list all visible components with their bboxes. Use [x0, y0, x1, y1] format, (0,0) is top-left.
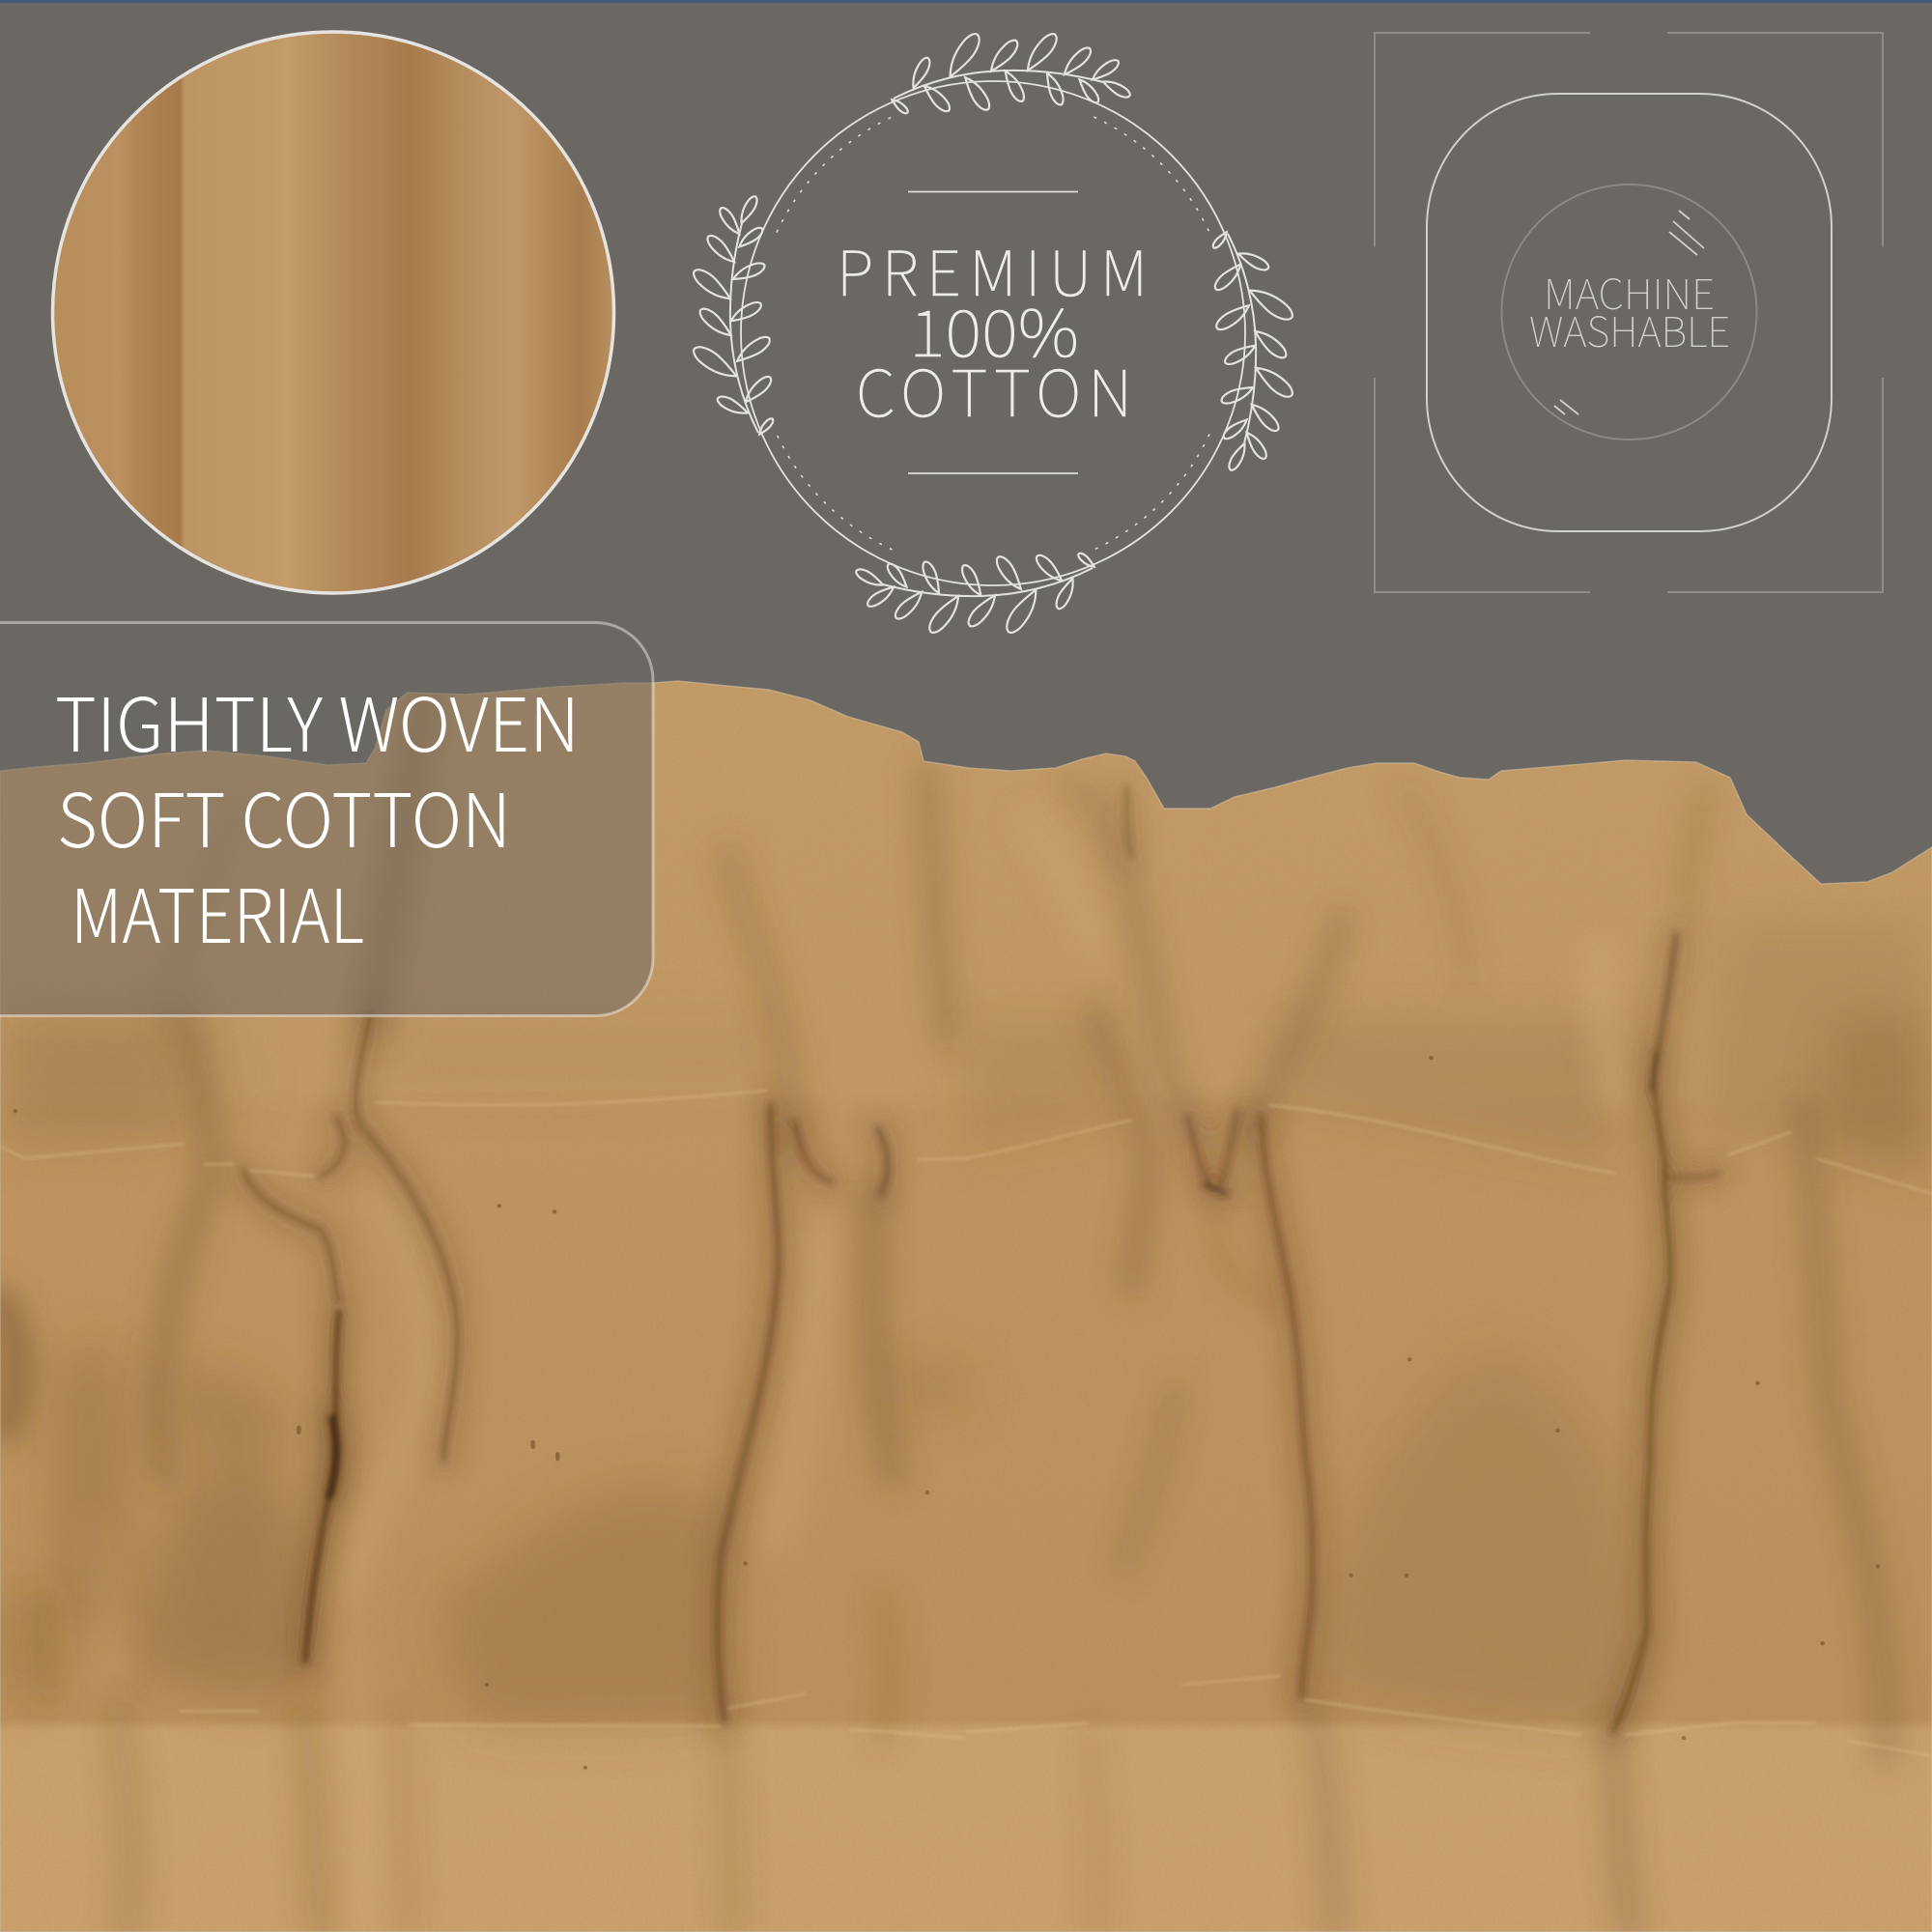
swatch: fabric close-up circle	[52, 32, 614, 593]
soft highlights	[346, 984, 1622, 1580]
heading: 100%: 100%	[909, 282, 1079, 376]
stitching lines	[0, 1091, 1932, 1755]
wreath branch right	[1094, 117, 1296, 472]
broad soft shading	[0, 918, 1932, 1732]
heading: cotton: COTTON	[856, 343, 1132, 436]
top blue strip	[0, 0, 1932, 3]
accent ticks upper	[1669, 211, 1704, 255]
wreath branch bottom	[854, 434, 1209, 637]
badge: machine washable	[1375, 33, 1883, 592]
callout: translucent text panel	[0, 622, 653, 1016]
label: machine: MACHINE	[1544, 262, 1715, 322]
wreath branch left	[690, 194, 893, 550]
text: soft cotton: SOFT COTTON	[57, 762, 511, 869]
rule above text	[908, 191, 1078, 193]
text: tightly woven: TIGHTLY WOVEN	[55, 667, 580, 774]
heading: premium: PREMIUM	[837, 225, 1148, 314]
fabric photo: pleated curtain	[0, 657, 1932, 1932]
corner brackets	[1375, 33, 1883, 592]
soft wide folds	[0, 696, 1887, 1932]
wreath ring	[741, 81, 1245, 585]
rounded square outline	[1427, 94, 1832, 531]
label: washable: WASHABLE	[1529, 299, 1730, 359]
badge: premium 100% cotton wreath	[690, 30, 1296, 637]
wreath branch top	[777, 30, 1132, 233]
glass panel	[0, 622, 653, 1016]
sharp dark creases	[243, 785, 1718, 1732]
fabric torn edge highlight	[0, 681, 1932, 1932]
text: material: MATERIAL	[71, 858, 364, 965]
accent ticks lower	[1554, 400, 1578, 414]
inner circle	[1501, 185, 1756, 440]
fabric specks	[15, 1058, 1878, 1768]
woven texture	[0, 657, 1932, 1932]
rule below text	[908, 472, 1078, 474]
